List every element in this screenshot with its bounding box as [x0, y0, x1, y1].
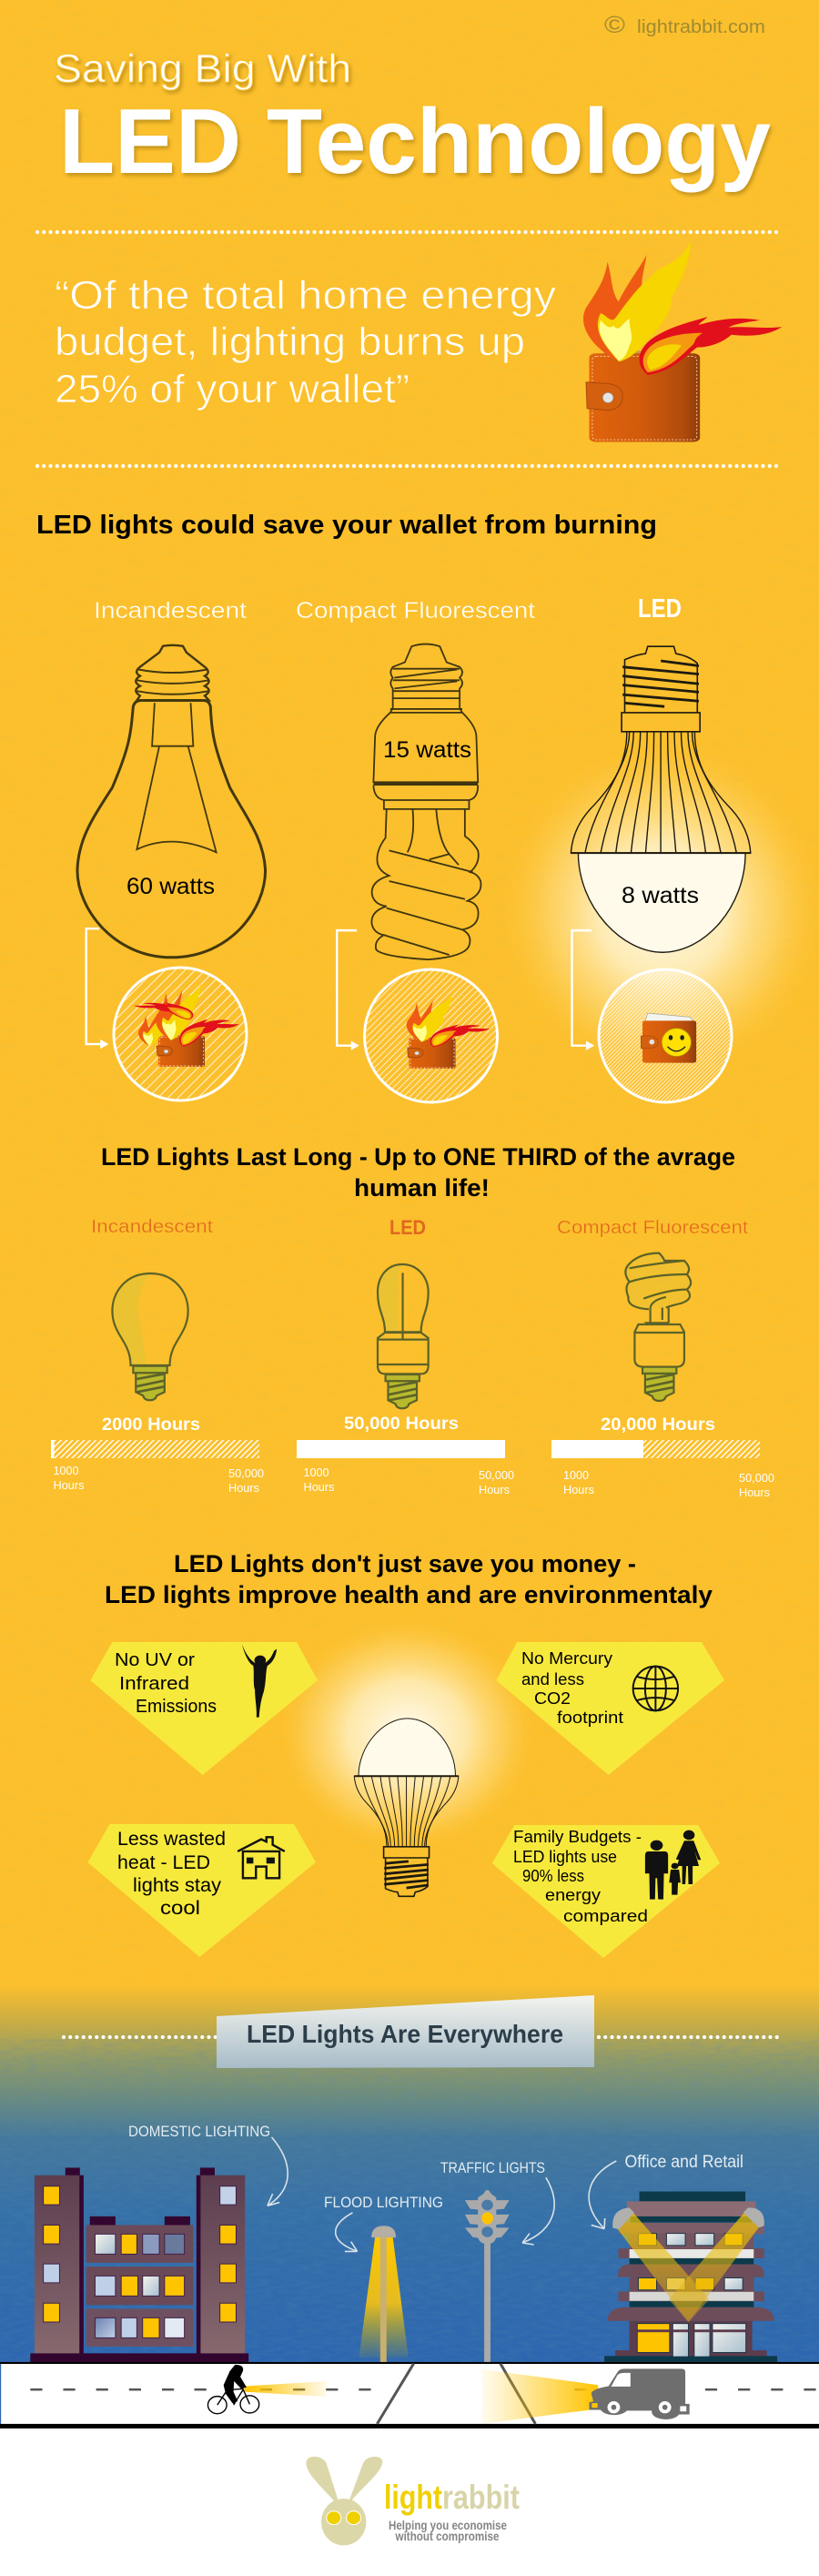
bulb type labels — [94, 594, 682, 624]
bar axis labels: Hours — [479, 1483, 510, 1496]
heading: LED lights last long: human life! — [354, 1174, 490, 1202]
icon: family — [645, 1831, 701, 1900]
labels: FLOOD LIGHTING — [324, 2194, 443, 2211]
callout: no mercury — [496, 1642, 724, 1775]
panel: bulb wattage comparison — [77, 594, 819, 1102]
progress bar: LED — [297, 1440, 505, 1458]
labels: Office and Retail — [624, 2153, 743, 2172]
compact fluorescent bulb drawing — [371, 644, 480, 959]
bar axis labels: 50,000 — [739, 1471, 774, 1485]
callout: no mercury: No Mercury — [521, 1649, 612, 1668]
icon: runner — [242, 1644, 277, 1718]
callout: family budgets: energy — [545, 1886, 601, 1904]
hours labels — [102, 1415, 715, 1435]
central LED bulb — [354, 1719, 459, 1896]
labels: DOMESTIC LIGHTING — [128, 2123, 270, 2140]
callout: no mercury: and less — [521, 1670, 584, 1689]
bracket arrow: incandescent to wallet — [86, 928, 108, 1049]
quote text: budget, lighting burns up — [55, 319, 525, 364]
bar axis labels: 1000 — [304, 1465, 329, 1479]
labels — [128, 2123, 743, 2211]
LED glow — [494, 737, 819, 1083]
lifespan bulb type labels: LED — [389, 1216, 426, 1239]
tagline: without compromise — [395, 2529, 500, 2543]
circle: happy wallet LED — [599, 969, 732, 1102]
tagline: Helping you economise — [389, 2518, 507, 2532]
icon: house — [238, 1837, 285, 1878]
panel: lifespan comparison — [51, 1216, 774, 1499]
rabbit mark — [306, 2457, 382, 2545]
title — [54, 46, 771, 193]
bracket arrow: fluorescent to wallet — [337, 930, 359, 1050]
callout: no mercury: CO2 — [534, 1689, 571, 1708]
bulb type labels: Incandescent — [94, 598, 247, 624]
heading: save your wallet: LED lights could save your wallet from burning — [36, 511, 657, 540]
bar axis labels: 1000 — [563, 1468, 589, 1482]
circle: burning wallet incandescent — [114, 968, 247, 1100]
callout: less heat: lights stay — [133, 1875, 222, 1896]
callout: no mercury: footprint — [557, 1709, 623, 1727]
copyright credit: lightrabbit.com — [637, 17, 765, 37]
dotted rule left — [64, 2035, 217, 2039]
callout: family budgets: Family Budgets - — [513, 1828, 642, 1846]
bar axis labels: Hours — [739, 1486, 770, 1499]
title: Saving Big With — [54, 46, 351, 91]
panel: street scene — [0, 2123, 819, 2429]
quote text: 25% of your wallet” — [55, 367, 410, 411]
office building — [604, 2192, 777, 2362]
wordmark: rabbit — [442, 2479, 520, 2516]
circle: burning wallet fluorescent — [364, 969, 497, 1102]
callout: less heat — [87, 1824, 316, 1957]
labels: TRAFFIC LIGHTS — [440, 2159, 545, 2176]
progress bar: compact fluorescent — [551, 1440, 760, 1458]
bar axis labels: 50,000 — [479, 1468, 514, 1482]
quote text — [55, 273, 556, 411]
bar axis labels: Hours — [53, 1478, 85, 1492]
curved arrows — [268, 2137, 616, 2251]
bar axis labels: Hours — [228, 1481, 259, 1495]
callout: family budgets: LED lights use — [513, 1848, 617, 1866]
copyright credit: © — [604, 11, 625, 38]
banner: LED Lights Are Everywhere: LED Lights Are Everywhere — [247, 2020, 563, 2048]
bar axis labels: Hours — [563, 1483, 594, 1496]
lifespan bulb type labels: Compact Fluorescent — [557, 1218, 748, 1238]
traffic light — [465, 2190, 510, 2364]
callout: family budgets: compared — [563, 1907, 648, 1925]
callout: less heat: Less wasted — [117, 1829, 226, 1850]
label: 60 watts: 60 watts — [126, 874, 215, 899]
bulb type labels: Compact Fluorescent — [296, 598, 535, 624]
label: 15 watts: 15 watts — [383, 737, 471, 763]
icon: burning wallet — [583, 241, 782, 442]
callout: family budgets: 90% less — [522, 1867, 584, 1885]
heading: health and environment — [105, 1550, 713, 1608]
panel: benefits — [87, 1616, 724, 1958]
callout: no UV: Emissions — [136, 1697, 217, 1717]
dotted rule right — [599, 2035, 781, 2039]
banner: LED Lights Are Everywhere — [217, 1995, 594, 2068]
callout: no UV: Infrared — [119, 1674, 189, 1694]
lifespan bulb type labels — [91, 1216, 748, 1239]
hours labels: 50,000 Hours — [344, 1415, 459, 1434]
progress bar: incandescent — [51, 1440, 259, 1458]
callout: no UV: No UV or — [115, 1650, 195, 1670]
apartment building — [30, 2167, 248, 2362]
cyclist — [207, 2365, 327, 2414]
bracket arrow: LED to wallet — [572, 930, 594, 1050]
icon: globe — [633, 1667, 678, 1710]
hours labels: 2000 Hours — [102, 1415, 200, 1435]
bar axis labels: 1000 — [53, 1464, 78, 1477]
heading: health and environment: LED lights improve health and are environmentaly — [105, 1581, 713, 1608]
copyright credit — [604, 11, 765, 38]
van — [481, 2368, 690, 2424]
wordmark — [384, 2479, 520, 2516]
callout: less heat: cool — [160, 1898, 200, 1919]
bar axis labels: 50,000 — [228, 1466, 264, 1480]
incandescent bulb drawing — [77, 645, 266, 958]
label: 8 watts: 8 watts — [622, 883, 699, 908]
bar axis labels: Hours — [304, 1480, 335, 1494]
hours labels: 20,000 Hours — [601, 1415, 715, 1435]
callout: less heat: heat - LED — [117, 1852, 210, 1873]
callout: family budgets — [492, 1825, 720, 1958]
heading: LED lights last long — [101, 1143, 735, 1202]
wordmark: light — [384, 2479, 442, 2516]
road — [0, 2362, 819, 2429]
central bulb glow — [275, 1616, 539, 1852]
bar axis labels — [53, 1464, 774, 1499]
icon: LED bulb small — [378, 1264, 429, 1408]
LED bulb drawing — [571, 646, 751, 952]
heading: LED lights last long: LED Lights Last Long - Up to ONE THIRD of the avrage — [101, 1143, 735, 1171]
tagline — [389, 2518, 507, 2543]
logo: lightrabbit — [306, 2457, 520, 2545]
title: LED Technology — [59, 91, 771, 193]
heading: health and environment: LED Lights don't just save you money - — [174, 1550, 636, 1577]
quote text: “Of the total home energy — [55, 273, 556, 318]
callout: no UV — [90, 1642, 318, 1775]
icon: compact fluorescent bulb small — [625, 1253, 691, 1401]
bulb type labels: LED — [638, 594, 682, 624]
flood light — [359, 2226, 409, 2362]
icon: incandescent bulb small — [112, 1273, 188, 1400]
lifespan bulb type labels: Incandescent — [91, 1217, 213, 1237]
